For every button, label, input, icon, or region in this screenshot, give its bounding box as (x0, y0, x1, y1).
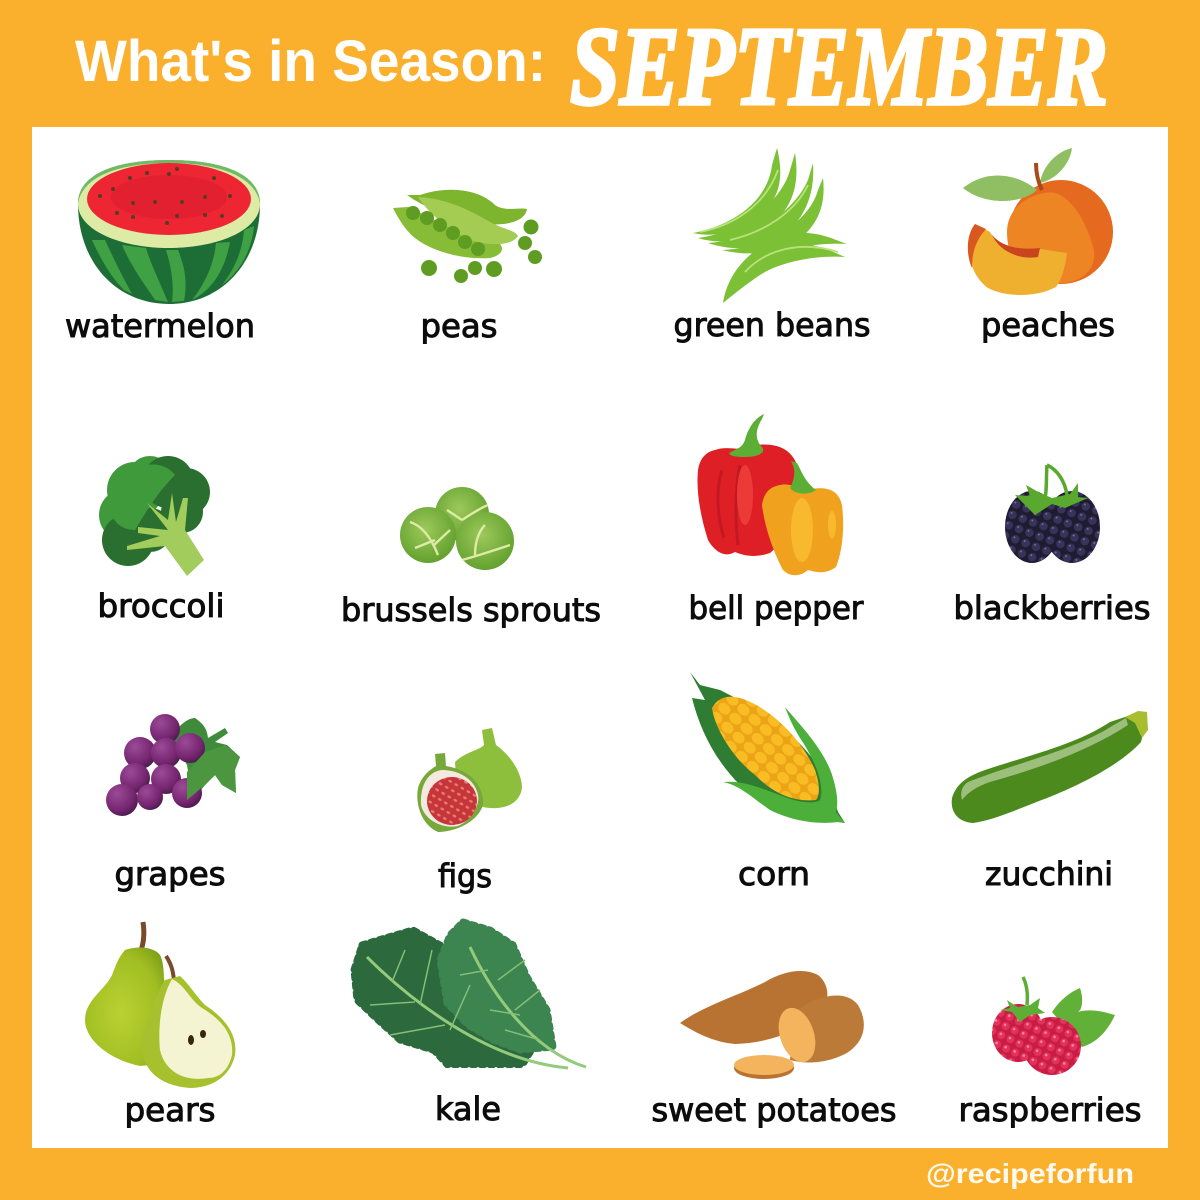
label: broccoli: broccoli (98, 587, 224, 625)
label: green beans: green beans (674, 306, 870, 344)
label: raspberries: raspberries (958, 1091, 1142, 1129)
icon: corn (690, 672, 845, 823)
label: corn: corn (738, 855, 810, 893)
label: blackberries: blackberries (954, 589, 1150, 627)
label: zucchini: zucchini (985, 855, 1113, 893)
icon: peach (963, 148, 1113, 295)
icon: pears (85, 922, 235, 1088)
label: figs: figs (438, 857, 492, 895)
label: brussels sprouts: brussels sprouts (341, 591, 601, 629)
icon: kale (354, 922, 586, 1068)
icon: green beans (693, 148, 847, 303)
label: peas: peas (420, 307, 498, 345)
label: kale: kale (435, 1090, 501, 1128)
label: grapes: grapes (114, 855, 226, 893)
icon: zucchini (952, 711, 1148, 823)
icon: sweet potatoes (680, 971, 864, 1079)
label: sweet potatoes: sweet potatoes (652, 1091, 896, 1129)
icon: grapes (106, 714, 240, 816)
label: watermelon: watermelon (65, 307, 255, 345)
icon: raspberries (992, 977, 1115, 1075)
title: What's in Season: What's in Season: (75, 29, 546, 94)
credit: handle: @recipeforfun (926, 1158, 1134, 1189)
icon: brussels sprouts (400, 487, 514, 570)
icon: broccoli (99, 456, 210, 576)
label: bell pepper: bell pepper (688, 589, 864, 627)
icon: bell peppers (697, 414, 843, 575)
label: peaches: peaches (981, 306, 1115, 344)
label: pears: pears (124, 1091, 216, 1129)
icon: figs (417, 728, 522, 832)
icon: peas (393, 190, 542, 283)
icon: watermelon (78, 160, 260, 304)
icon: blackberries (1005, 465, 1100, 563)
